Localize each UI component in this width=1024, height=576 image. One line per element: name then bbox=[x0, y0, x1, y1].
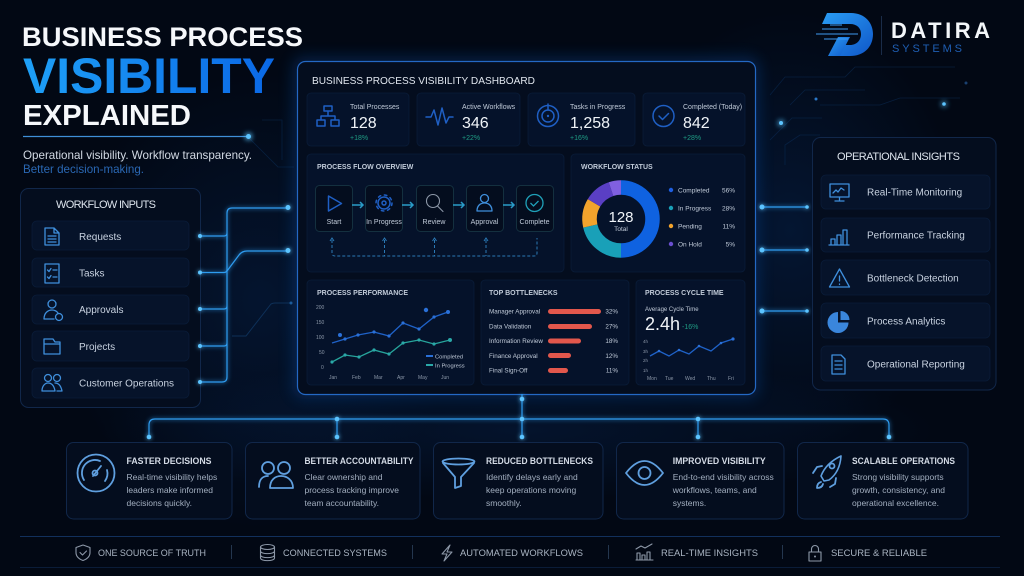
card: reduced bottlenecks: smoothly. bbox=[486, 498, 522, 508]
card: reduced bottlenecks: keep operations moving bbox=[486, 485, 577, 495]
row: process analytics: Process Analytics bbox=[867, 316, 945, 328]
kpi: completed today: +28% bbox=[683, 135, 701, 142]
row: tasks bbox=[32, 258, 189, 287]
item: real-time insights bbox=[636, 544, 758, 560]
step: start bbox=[316, 186, 352, 232]
heading: operational insights: OPERATIONAL INSIGHTS bbox=[837, 151, 960, 163]
card: scalable operations bbox=[798, 442, 968, 519]
title underline with glowing node bbox=[23, 134, 251, 139]
line chart: Jun bbox=[441, 375, 449, 381]
step: review: Review bbox=[423, 219, 446, 226]
chart legend bbox=[426, 354, 465, 370]
bar chart: 32% bbox=[605, 308, 618, 316]
donut legend: In Progress bbox=[678, 206, 712, 212]
kpi: active workflows: +22% bbox=[462, 135, 480, 142]
card: better accountability: process tracking improve bbox=[304, 485, 399, 495]
panel: process flow overview: PROCESS FLOW OVERVIEW bbox=[317, 164, 414, 171]
panel: process cycle time: PROCESS CYCLE TIME bbox=[645, 290, 724, 297]
donut legend: Pending bbox=[678, 224, 702, 230]
kpi: total processes: +18% bbox=[350, 135, 368, 142]
row: operational reporting: Operational Reporting bbox=[867, 360, 965, 370]
mini line chart: Mon bbox=[647, 376, 657, 382]
step: approval: Approval bbox=[471, 219, 499, 226]
line chart: Feb bbox=[352, 375, 361, 381]
panel: top bottlenecks: TOP BOTTLENECKS bbox=[489, 290, 558, 297]
row: projects bbox=[32, 331, 189, 361]
step: review bbox=[416, 186, 454, 232]
mini line chart bbox=[643, 337, 735, 382]
mini line chart: 1h bbox=[643, 368, 649, 373]
bar chart bbox=[489, 308, 618, 374]
panel: process cycle time bbox=[636, 280, 745, 385]
card: faster decisions: Real-time visibility helps bbox=[126, 472, 217, 482]
line chart: Jan bbox=[329, 375, 337, 381]
item: automated workflows: AUTOMATED WORKFLOWS bbox=[460, 548, 583, 559]
mini line chart: 4h bbox=[643, 339, 649, 344]
card: reduced bottlenecks: REDUCED BOTTLENECKS bbox=[486, 456, 593, 466]
chart legend: In Progress bbox=[435, 364, 465, 370]
metric: average cycle time: -16% bbox=[682, 324, 698, 331]
card: better accountability: team accountability. bbox=[304, 498, 379, 508]
mini line chart: Tue bbox=[665, 376, 674, 382]
connectors: dashboard to benefit cards bbox=[147, 394, 891, 439]
title: BUSINESS PROCESS bbox=[22, 22, 303, 52]
step: start: Start bbox=[327, 219, 341, 226]
line chart bbox=[316, 305, 452, 381]
card: improved visibility: systems. bbox=[673, 498, 706, 508]
bar chart: Final Sign-Off bbox=[489, 368, 528, 374]
card: better accountability bbox=[246, 442, 420, 519]
panel: dashboard bbox=[298, 62, 756, 394]
bar chart: Finance Approval bbox=[489, 353, 538, 360]
card: faster decisions: leaders make informed bbox=[126, 485, 213, 495]
kpi: active workflows bbox=[417, 93, 520, 146]
kpi: tasks in progress bbox=[528, 93, 635, 146]
step: in progress: In Progress bbox=[366, 219, 402, 226]
logo: Datira Systems bbox=[816, 13, 990, 56]
line chart: May bbox=[418, 375, 428, 381]
line chart: Apr bbox=[397, 375, 405, 381]
card: improved visibility: End-to-end visibility across bbox=[673, 472, 774, 482]
line chart: 50 bbox=[319, 350, 325, 356]
line chart: 200 bbox=[316, 305, 325, 311]
row: performance tracking: Performance Tracking bbox=[867, 230, 965, 242]
row: customer operations: Customer Operations bbox=[79, 378, 174, 390]
donut chart bbox=[590, 187, 653, 250]
bar chart: Information Review bbox=[489, 338, 543, 345]
mini line chart: 3h bbox=[643, 349, 649, 354]
card: reduced bottlenecks: Identify delays early and bbox=[486, 472, 578, 482]
icon: funnel bbox=[442, 458, 474, 488]
card: faster decisions bbox=[66, 442, 232, 519]
footer band bbox=[20, 536, 1000, 568]
kpi: total processes: Total Processes bbox=[350, 104, 400, 111]
card: improved visibility: IMPROVED VISIBILITY bbox=[673, 456, 766, 466]
step: complete: Complete bbox=[520, 219, 550, 226]
metric: average cycle time: 2.4h bbox=[645, 314, 680, 334]
line chart: 0 bbox=[321, 365, 324, 371]
subtitle: Better decision-making. bbox=[23, 162, 144, 176]
card: faster decisions: FASTER DECISIONS bbox=[126, 456, 212, 466]
heading: workflow inputs: WORKFLOW INPUTS bbox=[56, 199, 156, 211]
card: reduced bottlenecks bbox=[434, 442, 603, 519]
connectors: inputs to dashboard bbox=[198, 205, 290, 384]
title: EXPLAINED bbox=[23, 100, 191, 132]
mini line chart: Fri bbox=[728, 376, 734, 382]
donut total: 128 bbox=[608, 209, 634, 226]
row: approvals bbox=[32, 295, 189, 324]
kpi: tasks in progress: Tasks in Progress bbox=[570, 104, 626, 111]
mini line chart: Thu bbox=[707, 376, 716, 382]
panel: top bottlenecks bbox=[481, 280, 629, 385]
step: in progress bbox=[366, 186, 402, 232]
row: operational reporting bbox=[821, 346, 990, 381]
line chart: 150 bbox=[316, 320, 325, 326]
card: scalable operations: Strong visibility supports bbox=[852, 472, 944, 482]
logo: Datira Systems: SYSTEMS bbox=[892, 43, 962, 55]
decorative nodes bbox=[779, 82, 968, 125]
donut legend: 5% bbox=[726, 242, 735, 248]
metric: average cycle time bbox=[645, 307, 699, 334]
row: projects: Projects bbox=[79, 342, 115, 353]
panel: workflow status bbox=[571, 154, 745, 272]
donut legend bbox=[669, 188, 735, 248]
panel: process performance: PROCESS PERFORMANCE bbox=[317, 290, 408, 297]
kpi: completed today: 842 bbox=[683, 115, 710, 132]
heading: dashboard: BUSINESS PROCESS VISIBILITY DASHBOARD bbox=[312, 75, 535, 87]
panel: workflow status: WORKFLOW STATUS bbox=[581, 164, 653, 171]
row: performance tracking bbox=[821, 218, 990, 252]
icon: rocket bbox=[813, 456, 841, 488]
panel: process flow overview bbox=[307, 154, 564, 272]
item: one source of truth: ONE SOURCE OF TRUTH bbox=[98, 548, 206, 559]
panel: operational insights bbox=[812, 138, 996, 390]
chart legend: Completed bbox=[435, 354, 463, 360]
kpi: completed today: Completed (Today) bbox=[683, 104, 742, 111]
arrows: feedback loop bbox=[330, 238, 537, 256]
donut legend: 56% bbox=[722, 188, 735, 194]
row: process analytics bbox=[821, 303, 990, 338]
kpi: total processes: 128 bbox=[350, 115, 377, 132]
arrows: forward flow bbox=[352, 202, 514, 208]
donut legend: 11% bbox=[722, 224, 735, 230]
step: complete bbox=[516, 186, 554, 232]
mini line chart: Wed bbox=[685, 376, 695, 382]
card: scalable operations: growth, consistency, and bbox=[852, 485, 945, 495]
item: secure and reliable bbox=[809, 546, 927, 561]
row: real-time monitoring bbox=[821, 175, 990, 209]
row: real-time monitoring: Real-Time Monitoring bbox=[867, 188, 962, 198]
connectors: dashboard to insights bbox=[760, 204, 809, 314]
title: VISIBILITY bbox=[23, 48, 275, 104]
donut legend: Completed bbox=[678, 188, 710, 194]
card: improved visibility: workflows, teams, and bbox=[672, 485, 757, 495]
faint connector bbox=[232, 302, 292, 336]
donut legend: 28% bbox=[722, 206, 735, 212]
row: bottleneck detection: Bottleneck Detection bbox=[867, 274, 959, 284]
kpi: tasks in progress: 1,258 bbox=[570, 115, 610, 132]
card: faster decisions: decisions quickly. bbox=[126, 498, 192, 508]
row: tasks: Tasks bbox=[79, 268, 105, 280]
logo: Datira Systems: DATIRA bbox=[891, 18, 990, 43]
panel: workflow inputs bbox=[20, 188, 200, 408]
bar chart: 18% bbox=[605, 338, 618, 345]
row: customer operations bbox=[32, 368, 189, 398]
kpi: total processes bbox=[307, 93, 409, 146]
kpi: active workflows: 346 bbox=[462, 115, 489, 132]
line chart: Mar bbox=[374, 375, 383, 381]
card: scalable operations: SCALABLE OPERATIONS bbox=[852, 456, 955, 466]
row: requests: Requests bbox=[79, 232, 121, 243]
metric: average cycle time: Average Cycle Time bbox=[645, 307, 699, 313]
icon: eye bbox=[626, 461, 663, 485]
kpi: tasks in progress: +16% bbox=[570, 135, 588, 142]
subtitle bbox=[23, 148, 252, 176]
subtitle: Operational visibility. Workflow transparency. bbox=[23, 148, 252, 162]
mini line chart: 2h bbox=[643, 358, 649, 363]
card: improved visibility bbox=[616, 442, 784, 519]
item: connected systems bbox=[260, 544, 387, 561]
bar chart: 27% bbox=[605, 324, 618, 330]
item: automated workflows bbox=[442, 545, 583, 561]
donut total: Total bbox=[614, 226, 628, 233]
item: secure and reliable: SECURE & RELIABLE bbox=[831, 548, 927, 559]
kpi: active workflows: Active Workflows bbox=[462, 104, 516, 111]
bar chart: Manager Approval bbox=[489, 308, 540, 316]
card: better accountability: BETTER ACCOUNTABILITY bbox=[304, 456, 414, 466]
row: bottleneck detection bbox=[821, 260, 990, 295]
icon: people bbox=[259, 462, 293, 488]
panel: process performance bbox=[307, 280, 474, 385]
donut legend: On Hold bbox=[678, 242, 702, 248]
kpi: completed today bbox=[643, 93, 745, 146]
item: real-time insights: REAL-TIME INSIGHTS bbox=[661, 548, 758, 559]
item: one source of truth bbox=[76, 545, 206, 560]
bar chart: Data Validation bbox=[489, 324, 532, 330]
title bbox=[22, 22, 303, 132]
row: approvals: Approvals bbox=[79, 305, 123, 316]
icon: gauge bbox=[78, 454, 114, 492]
card: better accountability: Clear ownership and bbox=[304, 472, 383, 482]
line chart: 100 bbox=[316, 335, 325, 341]
step: approval bbox=[466, 186, 504, 232]
item: connected systems: CONNECTED SYSTEMS bbox=[283, 548, 387, 559]
row: requests bbox=[32, 221, 189, 250]
card: scalable operations: operational excellence. bbox=[852, 498, 939, 508]
bar chart: 11% bbox=[606, 368, 618, 374]
bar chart: 12% bbox=[605, 353, 618, 360]
